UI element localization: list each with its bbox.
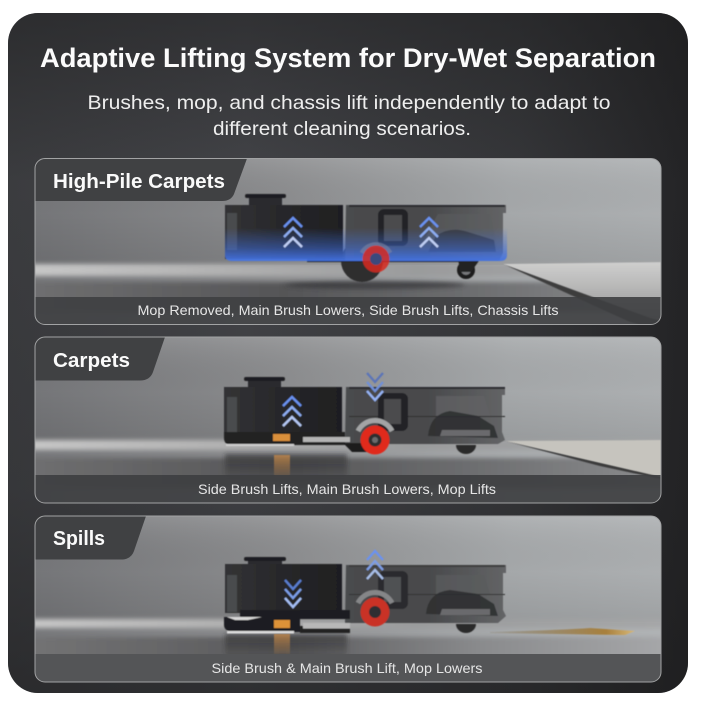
caster wheel <box>456 624 476 633</box>
caption: spills: Side Brush & Main Brush Lift, Mop Lowers <box>212 660 482 676</box>
caption: carpets: Side Brush Lifts, Main Brush Lowers, Mop Lifts <box>198 481 496 497</box>
subtitle: Brushes, mop, and chassis lift independently to adapt to <box>88 92 611 114</box>
carpet <box>504 262 660 297</box>
tag: high-pile carpets <box>35 158 247 201</box>
shell <box>345 565 506 623</box>
tag: spills <box>35 516 146 560</box>
caption bar <box>35 475 661 503</box>
shell <box>345 387 505 444</box>
mop plate <box>224 617 350 634</box>
main brush <box>358 592 392 626</box>
main wheel <box>341 240 383 282</box>
subtitle: different cleaning scenarios. <box>213 118 471 140</box>
arrow: lower centre <box>367 373 383 400</box>
blue lift band <box>225 228 507 261</box>
subtitle <box>88 92 611 140</box>
turret <box>244 557 286 565</box>
panel: carpets <box>34 336 662 504</box>
robot <box>225 194 507 282</box>
shell <box>345 205 506 261</box>
tag: high-pile carpets: High-Pile Carpets <box>53 171 225 193</box>
caption bar <box>35 654 661 682</box>
caster wheel <box>457 258 481 279</box>
turret <box>244 377 285 387</box>
reflection <box>225 634 347 656</box>
tag: spills: Spills <box>53 528 105 550</box>
dark block <box>225 205 343 259</box>
floor shadow <box>285 281 465 289</box>
chassis <box>224 432 345 445</box>
tag: carpets: Carpets <box>53 350 130 372</box>
dark block <box>225 564 342 613</box>
title: Adaptive Lifting System for Dry-Wet Separation <box>40 43 656 73</box>
caster wheel <box>456 445 476 454</box>
robot <box>224 373 505 454</box>
arrow: lift centre <box>367 551 383 579</box>
arrow: lift left <box>284 218 302 247</box>
caption: high-pile carpets: Mop Removed, Main Brush Lowers, Side Brush Lifts, Chassis Lifts <box>138 302 558 318</box>
arrow: lift left <box>283 397 301 426</box>
reflection <box>225 454 347 478</box>
spill stain <box>490 628 635 635</box>
arrow: lower left <box>285 580 301 607</box>
carpet <box>506 440 660 475</box>
arrow: lift right <box>420 218 438 247</box>
panel: high-pile carpets <box>34 158 662 325</box>
caption bar <box>35 297 661 325</box>
main brush <box>343 420 392 454</box>
robot <box>224 551 506 634</box>
turret <box>245 194 286 205</box>
dark block <box>224 387 342 433</box>
tag: carpets <box>35 337 165 380</box>
main brush <box>362 245 390 272</box>
panel: spills <box>34 516 662 682</box>
